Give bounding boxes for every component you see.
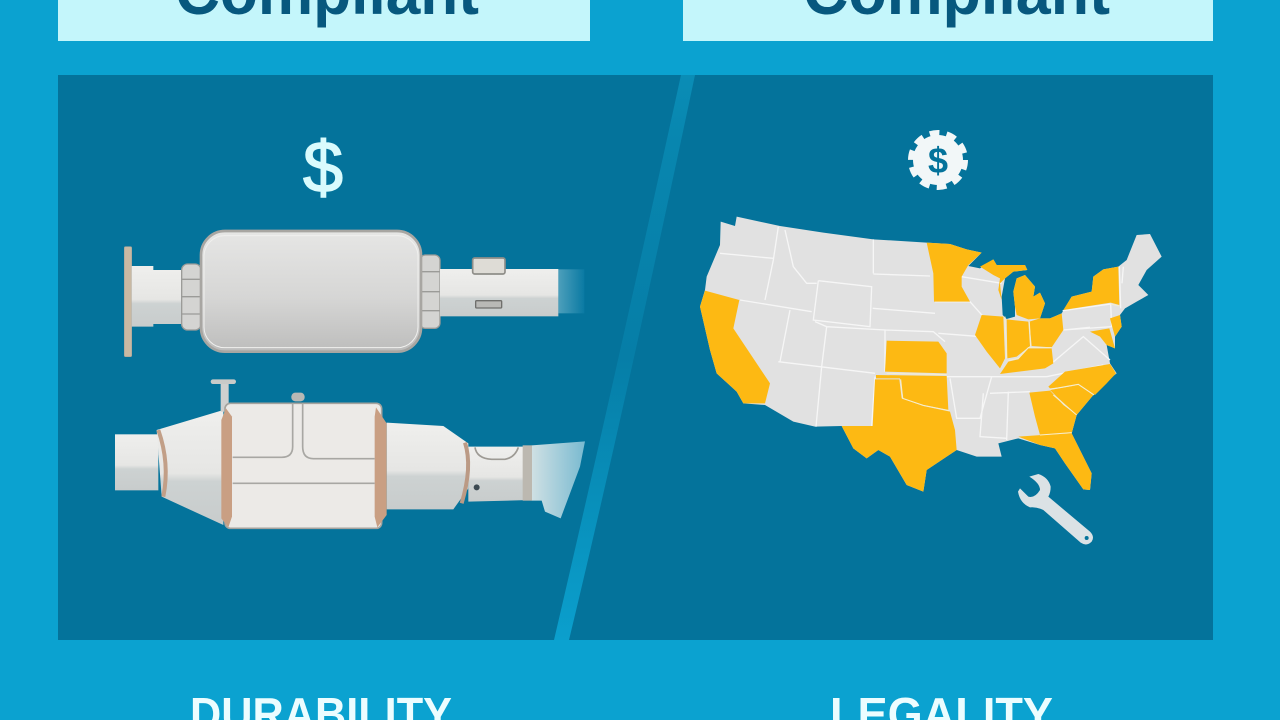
Michigan upper peninsula — [980, 259, 1027, 300]
rear cone — [387, 423, 468, 509]
gear dollar glyph: $ — [928, 140, 948, 181]
sensor slot — [476, 301, 502, 308]
outlet pipe — [440, 269, 558, 316]
panel: right heading box — [683, 0, 1213, 41]
icon: wrench — [1018, 474, 1093, 544]
outlet pipe — [468, 447, 530, 502]
Ohio — [1029, 313, 1063, 347]
Kansas — [885, 341, 947, 373]
small bolt — [474, 484, 480, 490]
Illinois — [975, 315, 1005, 368]
top cap — [291, 393, 305, 401]
New York — [1063, 267, 1119, 310]
Texas — [842, 379, 957, 492]
Georgia — [1029, 391, 1077, 435]
converter body — [201, 231, 421, 352]
Kentucky — [1000, 348, 1053, 374]
California — [700, 291, 770, 403]
copper bands — [221, 408, 232, 527]
highlighted states — [700, 243, 1122, 492]
Michigan lower peninsula — [1013, 275, 1045, 319]
South Carolina — [1050, 385, 1093, 415]
Oklahoma — [876, 375, 948, 410]
diagonal divider — [554, 75, 695, 640]
flange — [124, 247, 132, 357]
body panel seams — [233, 403, 375, 483]
grey states — [700, 217, 1162, 492]
map: United States — [700, 217, 1162, 492]
illustration: upper catalytic converter — [124, 231, 584, 357]
sensor mount — [473, 258, 505, 274]
tail pipe fade — [558, 269, 584, 313]
Maryland — [1090, 328, 1115, 348]
icon: gear with dollar — [912, 134, 964, 186]
exhaust fade — [532, 441, 585, 518]
right bellows — [420, 255, 440, 328]
wrench hole — [1085, 536, 1089, 540]
inlet pipe — [115, 434, 158, 490]
panel: left heading box — [58, 0, 590, 41]
New Jersey — [1110, 315, 1122, 337]
highlighted state borders — [887, 304, 1119, 435]
Indiana — [1007, 319, 1030, 358]
Florida — [1018, 433, 1092, 490]
panel: main dark comparison panel — [58, 75, 1213, 640]
illustration: lower catalytic converter — [115, 379, 585, 528]
icon: dollar sign: $ — [303, 128, 343, 208]
Minnesota — [927, 243, 982, 302]
mounting post — [211, 379, 236, 412]
main body — [225, 403, 382, 528]
left bellows — [182, 264, 201, 330]
inlet pipe — [132, 266, 182, 327]
North Carolina — [1048, 364, 1116, 395]
state borders — [720, 227, 1123, 440]
front cone — [157, 410, 223, 525]
